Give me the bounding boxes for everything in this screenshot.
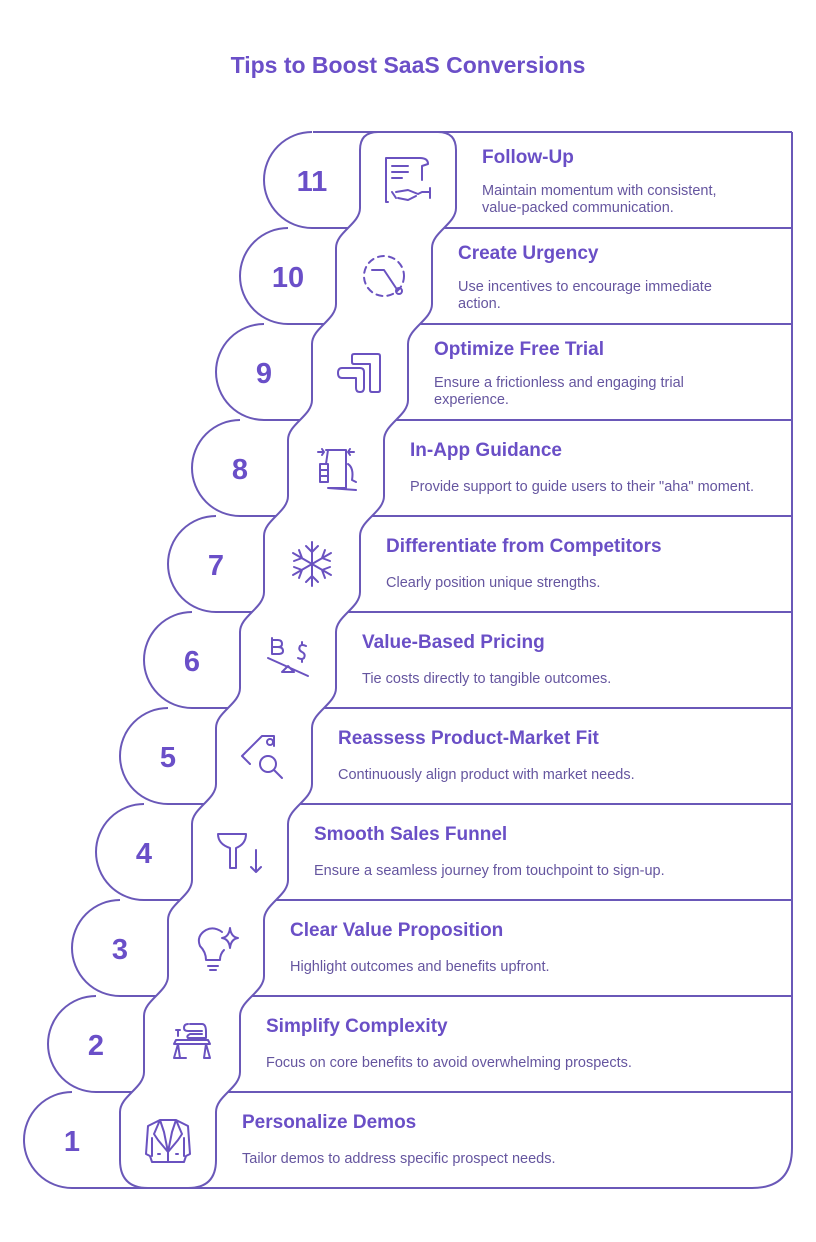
text: 11 Follow-Up: value-packed communication. (482, 200, 674, 216)
numbers: 5 (160, 742, 176, 774)
numbers (64, 166, 327, 1158)
text: 3 Clear Value Proposition: Highlight outcomes and benefits upfront. (290, 959, 550, 975)
icon: path blocks (338, 354, 380, 392)
text: 3 Clear Value Proposition: Clear Value Proposition (290, 920, 503, 941)
numbers: 1 (64, 1126, 80, 1158)
numbers: 3 (112, 934, 128, 966)
icon: snowflake (293, 542, 331, 586)
text: 7 Differentiate: Differentiate from Competitors (386, 536, 662, 557)
text: 4 Smooth Sales Funnel: Smooth Sales Funnel (314, 824, 507, 845)
numbers: 7 (208, 550, 224, 582)
numbers: 9 (256, 358, 272, 390)
numbers: 11 (297, 166, 327, 198)
text: 9 Optimize Free Trial: Ensure a frictionless and engaging trial (434, 375, 684, 391)
text: 1 Personalize Demos (242, 1112, 556, 1167)
text: 1 Personalize Demos: Personalize Demos (242, 1112, 416, 1133)
text: 5 Reassess PMF: Reassess Product-Market Fit (338, 728, 599, 749)
text: 11 Follow-Up: Follow-Up (482, 147, 574, 168)
numbers: 4 (136, 838, 152, 870)
icon: contract handshake (386, 158, 430, 202)
text: 9 Optimize Free Trial (434, 339, 684, 408)
text: 8 In-App Guidance: Provide support to guide users to their "aha" moment. (410, 479, 754, 495)
numbers: 2 (88, 1030, 104, 1062)
icon: bulb sparkle (199, 928, 238, 970)
text: 5 Reassess PMF: Continuously align product with market needs. (338, 767, 635, 783)
text: 10 Create Urgency: Create Urgency (458, 243, 599, 264)
text: 10 Create Urgency (458, 243, 712, 312)
text: 8 In-App Guidance (410, 440, 754, 495)
text: 6 Value-Based Pricing: Tie costs directly to tangible outcomes. (362, 671, 611, 687)
text: 10 Create Urgency: action. (458, 296, 501, 312)
title: Tips to Boost SaaS Conversions (231, 52, 585, 78)
text: 8 In-App Guidance: In-App Guidance (410, 440, 562, 461)
icon: blazer (146, 1120, 190, 1162)
text: 2 Simplify Complexity: Focus on core benefits to avoid overwhelming prospects. (266, 1055, 632, 1071)
numbers: 8 (232, 454, 248, 486)
text: 7 Differentiate (386, 536, 662, 591)
icon: tag with magnifier (242, 736, 282, 778)
text: 11 Follow-Up: Maintain momentum with consistent, (482, 183, 717, 199)
text: 4 Smooth Sales Funnel (314, 824, 665, 879)
text: 9 Optimize Free Trial: Optimize Free Trial (434, 339, 604, 360)
numbers: 6 (184, 646, 200, 678)
text: 3 Clear Value Proposition (290, 920, 550, 975)
icon: funnel (218, 834, 261, 872)
text: 5 Reassess PMF (338, 728, 635, 783)
text: 1 Personalize Demos: Tailor demos to address specific prospect needs. (242, 1151, 556, 1167)
numbers: 10 (272, 262, 304, 294)
text: 4 Smooth Sales Funnel: Ensure a seamless journey from touchpoint to sign-up. (314, 863, 665, 879)
icon: timer (364, 256, 404, 296)
text: 7 Differentiate: Clearly position unique strengths. (386, 575, 600, 591)
text: 11 Follow-Up (482, 147, 717, 216)
icon: phone in hand (318, 449, 356, 490)
icon: iron board (174, 1024, 210, 1058)
text: 6 Value-Based Pricing (362, 632, 611, 687)
text: 10 Create Urgency: Use incentives to encourage immediate (458, 279, 712, 295)
text: 2 Simplify Complexity (266, 1016, 632, 1071)
text: 9 Optimize Free Trial: experience. (434, 392, 509, 408)
icon: balance currency (268, 638, 308, 676)
text: 2 Simplify Complexity: Simplify Complexity (266, 1016, 448, 1037)
text: 6 Value-Based Pricing: Value-Based Pricing (362, 632, 545, 653)
